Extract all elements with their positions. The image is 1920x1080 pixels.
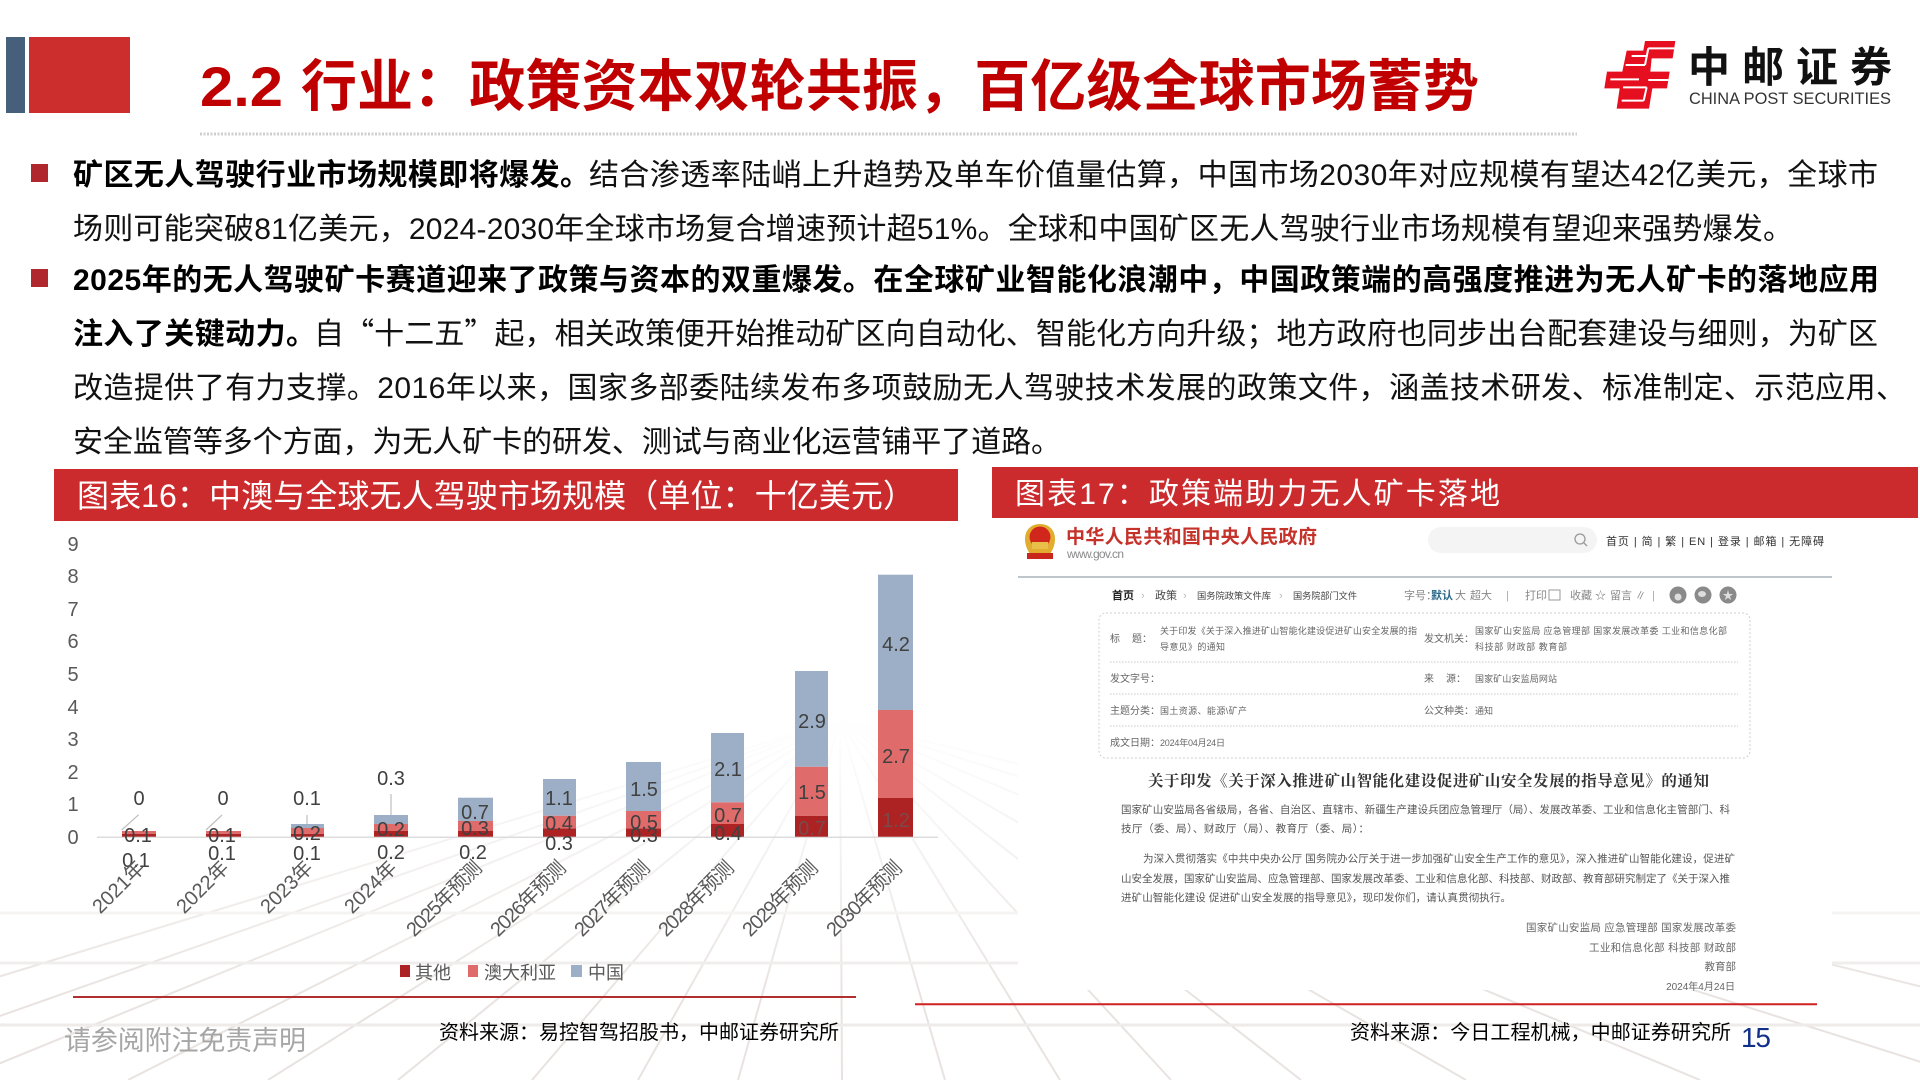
panel heading: figure 16: 图表16：中澳与全球无人驾驶市场规模（单位：十亿美元）	[77, 478, 915, 514]
bullet 2 bold line 2: 注入了关键动力。	[73, 318, 316, 351]
x axis category labels	[88, 856, 907, 941]
legend: 中国	[588, 963, 624, 983]
site rule	[1018, 576, 1832, 578]
y axis labels: 6	[67, 631, 79, 653]
screenshot: government policy notice	[1018, 520, 1832, 993]
metadata box: 国家矿山安监局网站	[1475, 673, 1557, 684]
x axis category labels: 2030年预测	[822, 856, 907, 941]
data labels: 0.1	[124, 825, 152, 847]
y axis labels: 3	[67, 729, 79, 751]
data labels: 4.2	[882, 634, 910, 656]
breadcrumb: |	[1652, 590, 1655, 602]
metadata box: 国土资源、能源\矿产	[1160, 705, 1247, 716]
logo wordmark: 中邮证券	[1688, 44, 1892, 91]
breadcrumb: 大	[1455, 588, 1466, 602]
data labels: 1.1	[545, 788, 573, 810]
data labels	[122, 634, 910, 872]
data labels: 0	[133, 788, 145, 810]
panel heading: figure 17: 图表17：政策端助力无人矿卡落地	[1015, 478, 1500, 511]
breadcrumb: 国务院政策文件库	[1197, 590, 1271, 601]
notice signature: 工业和信息化部 科技部 财政部	[1589, 941, 1736, 954]
data labels: 0.2	[293, 823, 321, 845]
breadcrumb: ›	[1279, 590, 1283, 602]
page number: 15	[1741, 1022, 1771, 1053]
x axis category labels: 2021年	[88, 856, 150, 918]
breadcrumb: 打印	[1525, 588, 1547, 602]
panel heading: figure 17	[992, 467, 1918, 518]
metadata box: 发文字号：	[1110, 672, 1160, 685]
breadcrumb: 政策	[1155, 588, 1177, 602]
body text block	[31, 159, 1906, 459]
title dotted rule	[200, 132, 1577, 136]
data labels: 0.3	[377, 768, 405, 790]
metadata box: 导意见》的通知	[1160, 641, 1225, 652]
data labels: 2.1	[714, 759, 742, 781]
x axis category labels: 2022年	[172, 856, 234, 918]
breadcrumb: ›	[1183, 590, 1187, 602]
bars: Australia (light red)	[122, 710, 913, 834]
bullet 2 bold line 1: 2025年的无人驾驶矿卡赛道迎来了政策与资本的双重爆发。在全球矿业智能化浪潮中，中国政策端的高强度推进为无人矿卡的落地应用	[73, 264, 1879, 297]
breadcrumb: ›	[1141, 590, 1145, 602]
data labels: 0.7	[798, 818, 826, 840]
site nav: 首页 | 简 | 繁 | EN | 登录 | 邮箱 | 无障碍	[1606, 534, 1824, 548]
source right: 资料来源：今日工程机械，中邮证券研究所	[1350, 1021, 1731, 1044]
metadata box: 通知	[1475, 705, 1493, 716]
metadata box: 国家矿山安监局 应急管理部 国家发展改革委 工业和信息化部	[1475, 625, 1727, 636]
bullet 2 line 4: 安全监管等多个方面，为无人矿卡的研发、测试与商业化运营铺平了道路。	[73, 426, 1061, 459]
source rule left	[73, 996, 856, 998]
x axis category labels: 2023年	[256, 856, 318, 918]
bullet 2 line 3: 改造提供了有力支撑。2016年以来，国家多部委陆续发布多项鼓励无人驾驶技术发展的政策文件，涵盖技术研发、标准制定、示范应用、	[73, 372, 1906, 405]
x axis category labels: 2025年预测	[402, 856, 487, 941]
bars: other (dark red)	[122, 798, 913, 837]
metadata box: 来 源：	[1424, 672, 1466, 685]
header decoration blocks	[6, 37, 130, 113]
data labels: 0	[217, 788, 229, 810]
y axis labels: 7	[67, 599, 79, 621]
data labels: 0.1	[208, 825, 236, 847]
notice body: 进矿山智能化建设 促进矿山安全发展的指导意见》，现印发你们，请认真贯彻执行。	[1121, 891, 1511, 904]
data labels: 0.1	[293, 843, 321, 865]
data labels: 0.2	[377, 819, 405, 841]
x axis category labels: 2028年预测	[654, 856, 739, 941]
data labels: 0.2	[377, 842, 405, 864]
logo: China Post Securities	[1604, 41, 1892, 109]
data labels: 0.3	[630, 825, 658, 847]
breadcrumb	[1112, 588, 1655, 602]
notice signature: 国家矿山安监局 应急管理部 国家发展改革委	[1526, 921, 1736, 934]
data labels: 0.3	[545, 833, 573, 855]
site url: www.gov.cn	[1066, 547, 1124, 561]
legend: 其他	[415, 963, 451, 983]
breadcrumb: 收藏 ☆	[1570, 588, 1606, 602]
share icons: ★	[1722, 590, 1734, 602]
data labels: 0.4	[545, 813, 573, 835]
x axis category labels: 2027年预测	[570, 856, 655, 941]
metadata box	[1099, 613, 1750, 758]
legend: 澳大利亚	[484, 963, 556, 983]
x axis line	[97, 836, 938, 838]
bullet 2 line 2: 自“十二五”起，相关政策便开始推动矿区向自动化、智能化方向升级；地方政府也同步出台配套建设与细则，为矿区	[314, 309, 1878, 353]
y axis labels: 4	[67, 697, 79, 719]
data labels: 0.7	[714, 805, 742, 827]
data labels: 0.1	[208, 843, 236, 865]
breadcrumb: 字号：	[1404, 588, 1437, 602]
data labels: 2.9	[798, 711, 826, 733]
data labels: 0.3	[461, 818, 489, 840]
legend	[400, 963, 624, 983]
breadcrumb: 国务院部门文件	[1293, 590, 1357, 601]
title: 行业：政策资本双轮共振，百亿级全球市场蓄势	[301, 55, 1479, 118]
y axis labels: 2	[67, 762, 79, 784]
x axis category labels: 2024年	[340, 856, 402, 918]
y axis labels: 9	[67, 534, 79, 556]
icon: national emblem	[1025, 524, 1055, 559]
leader lines	[122, 794, 391, 830]
y axis labels: 1	[67, 794, 79, 816]
disclaimer: 请参阅附注免责声明	[64, 1026, 306, 1056]
source left: 资料来源：易控智驾招股书，中邮证券研究所	[439, 1021, 839, 1044]
bullet 1 line 2: 场则可能突破81亿美元，2024-2030年全球市场复合增速预计超51%。全球和中国矿区无人驾驶行业市场规模有望迎来强势爆发。	[73, 213, 1793, 246]
bullet 1 bold lead: 矿区无人驾驶行业市场规模即将爆发。	[73, 159, 590, 192]
x axis category labels: 2026年预测	[486, 856, 571, 941]
search box	[1428, 527, 1597, 553]
metadata box: 公文种类：	[1424, 704, 1474, 717]
breadcrumb: |	[1506, 590, 1509, 602]
y axis labels	[67, 534, 79, 849]
notice body	[1121, 803, 1735, 904]
metadata box: 标 题：	[1110, 633, 1152, 645]
metadata box: 主题分类：	[1110, 704, 1160, 717]
logo english: CHINA POST SECURITIES	[1689, 89, 1891, 108]
source rule right	[915, 1003, 1817, 1005]
data labels: 0.5	[630, 812, 658, 834]
breadcrumb: 首页	[1112, 588, 1134, 602]
notice body: 山安全发展，国家矿山安监局、应急管理部、国家发展改革委、工业和信息化部、科技部、财政部、教育部研究制定了《关于深入推	[1121, 872, 1730, 885]
data labels: 0.7	[461, 802, 489, 824]
y axis labels: 0	[67, 827, 79, 849]
share icons	[1670, 586, 1736, 604]
bars: China (blue)	[291, 575, 913, 828]
icon: post emblem	[1604, 41, 1675, 109]
data labels: 0.2	[459, 842, 487, 864]
notice signature	[1526, 921, 1736, 993]
metadata box: 科技部 财政部 教育部	[1475, 641, 1567, 652]
breadcrumb: 默认	[1431, 588, 1453, 602]
metadata box: 2024年04月24日	[1160, 737, 1225, 748]
bullet 1	[31, 164, 48, 182]
title: 2.2	[200, 55, 283, 118]
data labels: 0.4	[714, 823, 742, 845]
bullet 1 line 1: 结合渗透率陆峭上升趋势及单车价值量估算，中国市场2030年对应规模有望达42亿美元，全球市	[589, 159, 1878, 192]
data labels: 1.5	[798, 782, 826, 804]
bullet 2	[31, 269, 48, 287]
metadata box: 成文日期：	[1110, 736, 1160, 749]
notice body: 为深入贯彻落实《中共中央办公厅 国务院办公厅关于进一步加强矿山安全生产工作的意见》，深入推进矿山智能化建设，促进矿	[1143, 852, 1735, 865]
data labels: 1.2	[882, 810, 910, 832]
y axis labels: 5	[67, 664, 79, 686]
notice body: 国家矿山安监局各省级局，各省、自治区、直辖市、新疆生产建设兵团应急管理厅（局）、发展改革委、工业和信息化主管部门、科	[1121, 803, 1730, 816]
panel heading: figure 16	[54, 469, 958, 521]
data labels: 0.1	[293, 788, 321, 810]
stacked bar chart: market size	[67, 534, 938, 983]
metadata box: 发文机关：	[1424, 632, 1474, 645]
notice signature: 教育部	[1704, 960, 1736, 973]
data labels: 2.7	[882, 746, 910, 768]
metadata box: 关于印发《关于深入推进矿山智能化建设促进矿山安全发展的指	[1160, 625, 1417, 636]
breadcrumb: 留言 ∥	[1610, 589, 1646, 602]
x axis category labels: 2029年预测	[738, 856, 823, 941]
breadcrumb: 超大	[1470, 588, 1492, 602]
site title: 中华人民共和国中央人民政府	[1066, 525, 1317, 548]
notice signature: 2024年4月24日	[1666, 980, 1735, 993]
data labels: 0.1	[122, 850, 150, 872]
y axis labels: 8	[67, 566, 79, 588]
notice body: 技厅（委、局）、财政厅（局）、教育厅（委、局）：	[1121, 822, 1369, 835]
data labels: 1.5	[630, 779, 658, 801]
notice heading: 关于印发《关于深入推进矿山智能化建设促进矿山安全发展的指导意见》的通知	[1148, 771, 1709, 790]
